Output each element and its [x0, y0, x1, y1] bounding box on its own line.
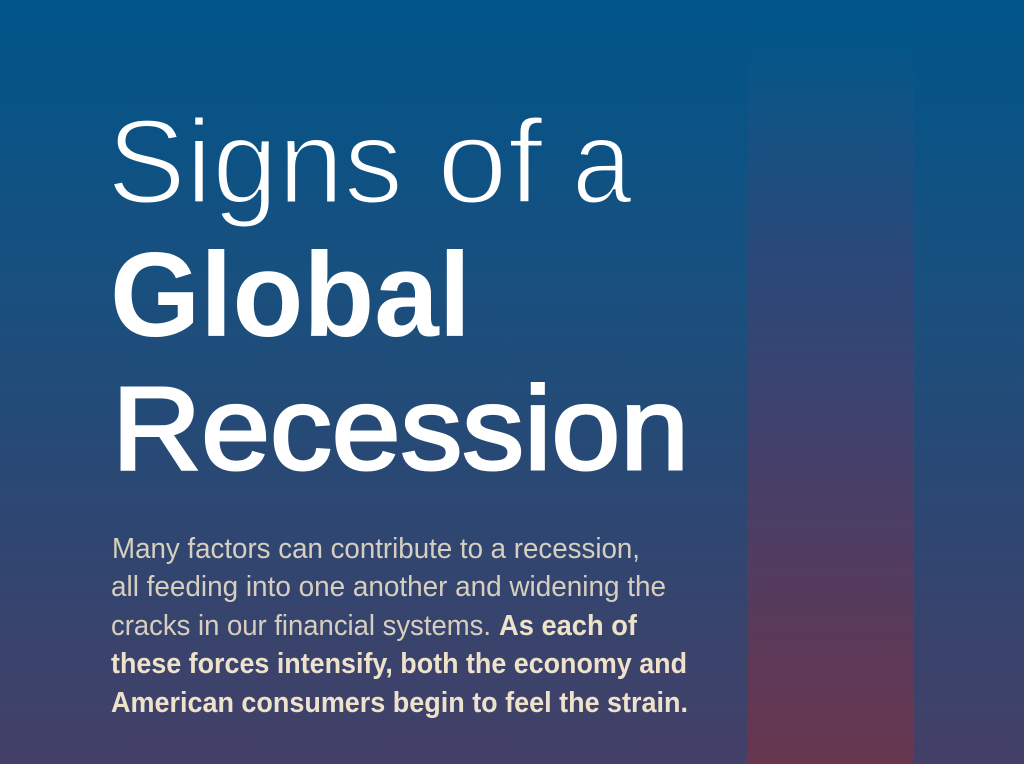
intro line 3 regular: cracks in our financial systems.	[111, 610, 491, 642]
title line: Global: Global	[110, 228, 471, 362]
intro line 5 bold: American consumers begin to feel the strain.	[111, 687, 688, 719]
intro line 2: all feeding into one another and widening the	[111, 571, 666, 603]
vertical gradient stripe	[747, 20, 914, 764]
intro paragraph	[111, 533, 688, 719]
intro line 1: Many factors can contribute to a recession,	[112, 533, 640, 565]
title word: Signs: Signs	[107, 95, 403, 229]
title line: Recession: Recession	[112, 363, 689, 495]
title	[107, 95, 689, 495]
title word: of: of	[437, 95, 544, 229]
intro line 3 bold: As each of	[499, 610, 637, 642]
title word: a: a	[572, 95, 632, 229]
intro line 4 bold: these forces intensify, both the economy and	[111, 648, 687, 680]
